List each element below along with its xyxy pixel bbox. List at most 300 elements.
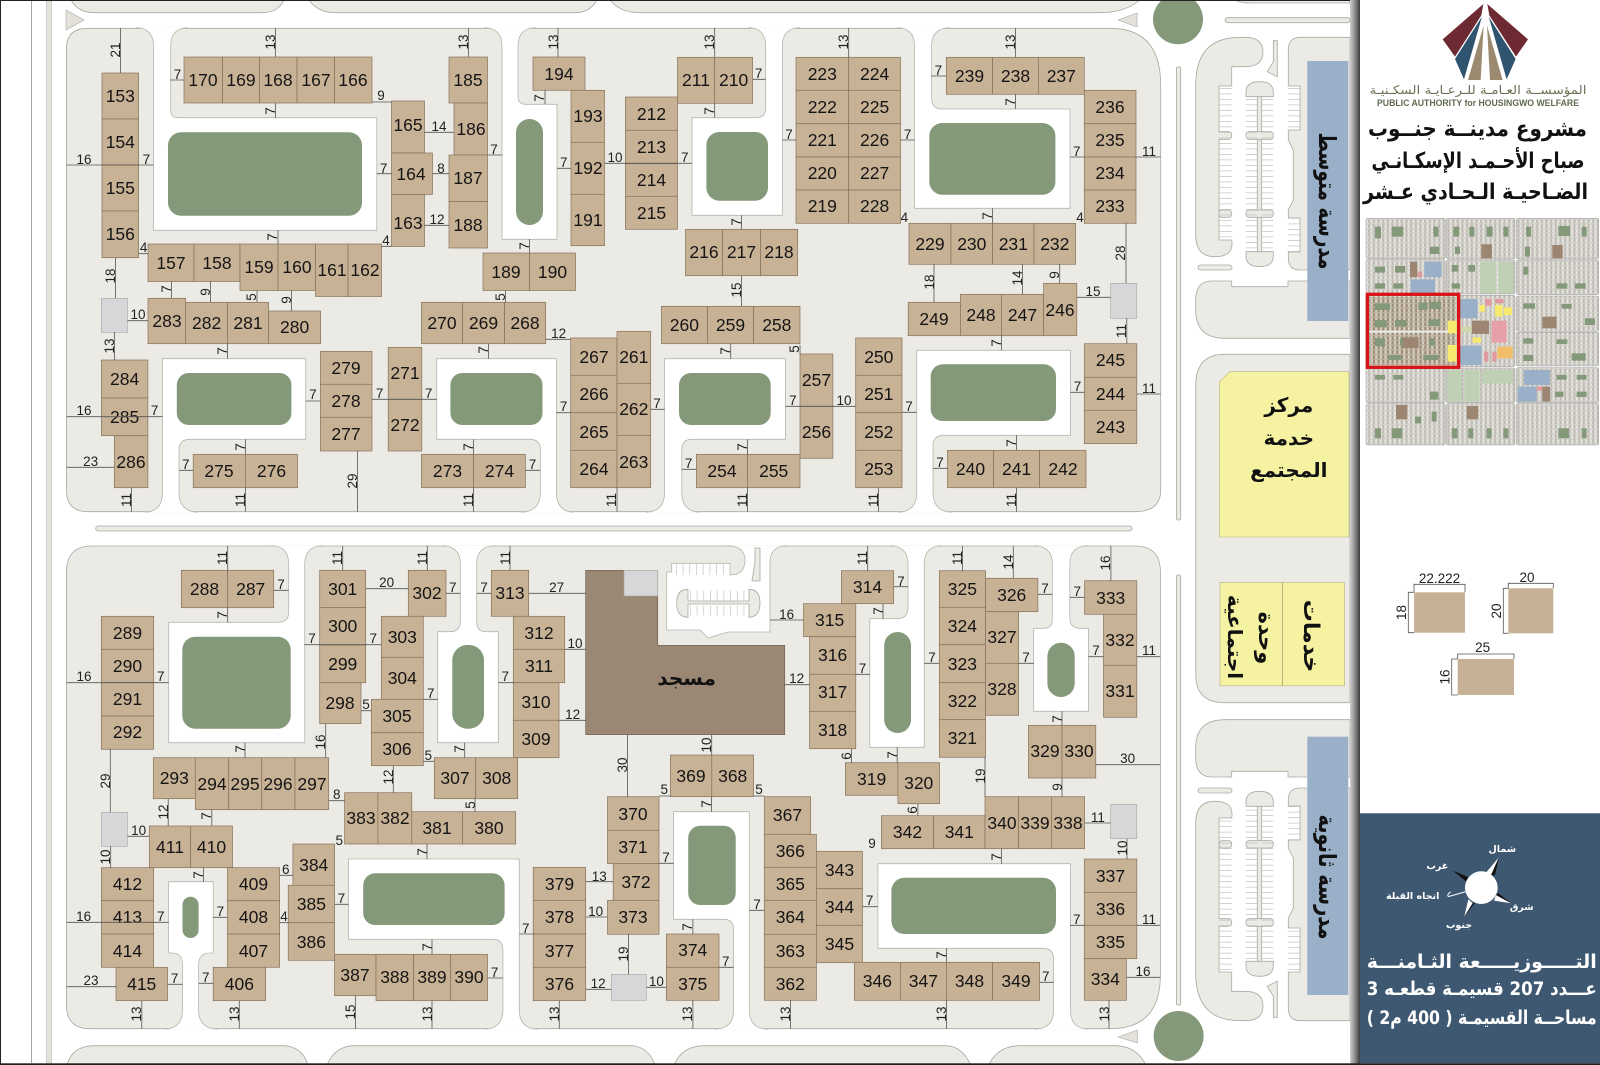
- distribution summary: [1367, 951, 1597, 1029]
- lots: middle row west: 274: [485, 461, 514, 481]
- secondary-school plot: [1307, 737, 1348, 995]
- dimensions: upper block bottom half: 11: [1142, 381, 1156, 396]
- dimensions: lower block top half: 11: [855, 551, 870, 565]
- dimensions: lower block top half: 16: [76, 669, 92, 684]
- lots: north-east cluster: 226: [860, 130, 889, 150]
- dimensions: lower block bottom half: 13: [420, 1006, 435, 1022]
- dimensions: lower block bottom half: 7: [1042, 969, 1049, 984]
- lots: middle row east: 250: [864, 347, 894, 367]
- lots: middle row east: 243: [1096, 417, 1125, 437]
- dimensions: lower block bottom half: 10: [1115, 840, 1130, 856]
- dimensions: upper block top half: 9: [198, 288, 213, 296]
- compass labels: جنوب: [1446, 920, 1472, 931]
- bottom neighbouring block edges: [67, 1046, 1146, 1065]
- lots: lower west top: 302: [412, 583, 442, 603]
- dimensions: lower block bottom half: 13: [129, 1006, 144, 1022]
- lots: north-west cluster: 188: [453, 215, 483, 235]
- dimensions: upper block bottom half: 7: [560, 399, 567, 414]
- secondary-school plot: مدرسة ثانوية: [1313, 814, 1341, 940]
- lots: north-west cluster: 185: [453, 70, 483, 90]
- dimensions: lower block top half: 7: [480, 580, 488, 595]
- lots: lower east bottom: 346: [863, 971, 892, 991]
- dimensions: lower block bottom half: 7: [989, 853, 1004, 861]
- lots: middle row west: 278: [331, 391, 361, 411]
- lots: lower west top: 291: [113, 689, 142, 709]
- dimensions: upper block bottom half: 5: [787, 345, 802, 353]
- dimensions: lower block bottom half: 13: [778, 1006, 793, 1022]
- social services unit: خدمات: [1298, 600, 1323, 672]
- dimensions: upper block bottom half: 7: [653, 396, 661, 411]
- lots: middle row west: 268: [510, 313, 540, 333]
- lots: north-east cluster: 232: [1040, 234, 1069, 254]
- lots: lower west top: 304: [388, 668, 417, 688]
- dimensions: lower block top half: 12: [565, 707, 580, 722]
- dimensions: upper block bottom half: 7: [789, 393, 797, 408]
- dimensions: upper block top half: 4: [1076, 210, 1084, 225]
- dimensions: upper block top half: 11: [1142, 144, 1156, 159]
- dimensions: lower block bottom half: 7: [722, 954, 729, 969]
- dimensions: upper block bottom half: 7: [1004, 439, 1019, 447]
- dimensions: lower block top half: 7: [1050, 715, 1065, 723]
- lots: lower east top: 316: [818, 645, 847, 665]
- lots: middle row west: 280: [280, 317, 309, 337]
- lots: middle row west: 281: [233, 313, 263, 333]
- dimensions: lower block top half: 16: [779, 607, 794, 622]
- dimensions: upper block top half: 14: [431, 119, 447, 134]
- dimensions: lower block bottom half: 6: [282, 862, 289, 877]
- lots: north-east cluster: 229: [915, 234, 945, 254]
- dimensions: upper block bottom half: 7: [233, 443, 248, 451]
- dimensions: lower block bottom half: 13: [1097, 1006, 1112, 1022]
- lots: lower east top: 317: [818, 682, 847, 702]
- dimensions: lower block bottom half: 7: [1073, 912, 1081, 927]
- lots: middle row west: 285: [110, 407, 139, 427]
- lots: north-east cluster: 221: [808, 130, 837, 150]
- dimensions: upper block top half: 7: [490, 142, 498, 157]
- dimensions: lower block top half: 7: [452, 745, 467, 753]
- plot size diagrams: [1394, 570, 1553, 695]
- dimensions: lower block bottom half: 10: [649, 974, 664, 989]
- dimensions: lower block bottom half: 5: [755, 782, 763, 797]
- lots: north-east cluster: [625, 57, 1136, 276]
- dimensions: lower block top half: 5: [362, 697, 370, 712]
- dimensions: upper block top half: 5: [244, 293, 259, 301]
- lots: middle row east: 246: [1045, 300, 1075, 320]
- dimensions: lower block bottom half: 7: [191, 871, 206, 879]
- lots: middle row west: 264: [579, 459, 609, 479]
- lots: middle row east: 253: [864, 459, 893, 479]
- dimensions: lower block bottom half: 16: [76, 909, 91, 924]
- dimensions: upper block top half: 7: [681, 150, 688, 165]
- dimensions: upper block top half: 15: [729, 282, 744, 298]
- lots: lower west top: 299: [328, 654, 357, 674]
- lots: lower east top: 328: [987, 679, 1017, 699]
- dimensions: lower block top half: 7: [199, 812, 214, 820]
- lots: north-east cluster: 231: [999, 234, 1028, 254]
- dimensions: lower block bottom half: 10: [588, 904, 603, 919]
- dimensions: upper block top half: 21: [108, 42, 123, 58]
- dimensions: upper block bottom half: 12: [551, 326, 566, 341]
- dimensions: upper block bottom half: [66, 284, 1161, 512]
- compass labels: شمال: [1489, 844, 1516, 855]
- dimensions: lower block top half: 7: [370, 631, 377, 646]
- lots: north-east cluster: 225: [860, 97, 889, 117]
- lots: lower west bottom: 378: [545, 907, 574, 927]
- dimensions: upper block top half: 9: [1047, 271, 1062, 279]
- lots: lower east bottom: 337: [1096, 866, 1125, 886]
- dimensions: upper block top half: 7: [785, 127, 793, 142]
- lots: lower west bottom: 390: [454, 967, 484, 987]
- lots: north-west cluster: 160: [282, 257, 312, 277]
- lots: lower east top: 325: [948, 579, 977, 599]
- lots: middle row west: 282: [192, 313, 221, 333]
- lots: lower west bottom: 413: [113, 907, 142, 927]
- lots: middle row east: 255: [759, 461, 788, 481]
- dimensions: lower block bottom half: 6: [905, 806, 920, 814]
- title: [1362, 117, 1588, 205]
- lots: lower east bottom: 349: [1001, 971, 1031, 991]
- lots: middle row west: 266: [579, 384, 609, 404]
- lots: middle row east: 240: [956, 459, 985, 479]
- dimensions: lower block top half: 30: [615, 757, 630, 773]
- lots: lower west top: [101, 570, 565, 810]
- lots: lower east bottom: 375: [678, 974, 707, 994]
- dimensions: lower block top half: 10: [567, 636, 583, 651]
- dimensions: lower block top half: 7: [897, 574, 905, 589]
- side panel shadow: [1350, 0, 1360, 1065]
- lots: middle row east: [617, 283, 1137, 488]
- lots: lower east top: 330: [1064, 741, 1094, 761]
- dimensions: upper block top half: 8: [437, 161, 445, 176]
- lots: north-west cluster: 156: [106, 224, 135, 244]
- lots: lower east bottom: 343: [825, 860, 854, 880]
- dimensions: upper block bottom half: 7: [182, 457, 189, 472]
- lots: middle row west: 269: [469, 313, 498, 333]
- lots: north-west cluster: 154: [106, 132, 135, 152]
- lots: north-east cluster: 214: [637, 170, 666, 190]
- lots: lower east bottom: 374: [678, 940, 708, 960]
- dimensions: lower block top half: 11: [498, 551, 513, 565]
- lots: north-east cluster: 239: [955, 66, 984, 86]
- dimensions: upper block top half: 5: [493, 293, 508, 301]
- dimensions: lower block bottom half: 11: [1091, 810, 1105, 825]
- lots: lower east bottom: 348: [955, 971, 984, 991]
- lots: middle row east: 259: [716, 315, 745, 335]
- dimensions: lower block top half: 7: [427, 686, 434, 701]
- lots: lower west top: 307: [440, 768, 470, 788]
- lots: north-west cluster: 165: [393, 115, 423, 135]
- dimensions: upper block bottom half: 13: [102, 338, 117, 354]
- dimensions: upper block bottom half: 16: [76, 403, 92, 418]
- dimensions: lower block bottom half: 7: [491, 965, 498, 980]
- lots: lower east top: 321: [948, 728, 977, 748]
- lots: north-east cluster: 210: [719, 70, 748, 90]
- dimensions: lower block top half: 7: [157, 669, 164, 684]
- lots: lower west bottom: 388: [380, 967, 409, 987]
- dimensions: lower block top half: 10: [699, 737, 714, 753]
- lots: north-east cluster: 233: [1095, 196, 1125, 216]
- lots: north-west cluster: 161: [317, 260, 347, 280]
- dimensions: lower block top half: 5: [425, 748, 432, 763]
- lots: middle row east: 244: [1096, 384, 1125, 404]
- dimensions: lower block bottom half: 7: [753, 897, 761, 912]
- lots: north-east cluster: 227: [860, 163, 889, 183]
- dimensions: upper block top half: 7: [1073, 144, 1081, 159]
- dimensions: lower block top half: 7: [885, 751, 900, 759]
- dimensions: upper block bottom half: 7: [905, 399, 913, 414]
- dimensions: upper block top half: 7: [904, 127, 911, 142]
- dimensions: upper block top half: 13: [263, 34, 278, 50]
- authority name Arabic: المؤسســة العـامـة للـرعـايـة السكـنيـة: [1370, 83, 1586, 98]
- dimensions: upper block top half: 7: [755, 66, 762, 81]
- lots: lower west bottom: 415: [127, 974, 156, 994]
- community service centre block: خدمة: [1264, 426, 1314, 450]
- lots: lower east bottom: 336: [1096, 899, 1125, 919]
- lots: lower east top: 333: [1096, 588, 1125, 608]
- lots: north-east cluster: 234: [1095, 163, 1125, 183]
- dimensions: upper block bottom half: 11: [461, 493, 476, 507]
- dimensions: lower block bottom half: 12: [591, 976, 606, 991]
- dimensions: upper block bottom half: 11: [735, 493, 750, 507]
- dimensions: upper block bottom half: 7: [425, 386, 432, 401]
- lots: lower west top: 295: [230, 774, 260, 794]
- dimensions: lower block top half: 11: [215, 551, 230, 565]
- lots: lower west bottom: 381: [422, 818, 452, 838]
- dimensions: lower block top half: 7: [1041, 581, 1049, 596]
- dimensions: lower block top half: 7: [1073, 584, 1081, 599]
- middle-school plot: مدرسة متوسط: [1313, 132, 1341, 270]
- dimensions: lower block bottom half: 19: [973, 768, 988, 784]
- lots: middle row west: 276: [257, 461, 286, 481]
- lots: lower west top: 308: [482, 768, 511, 788]
- dimensions: lower block top half: 7: [871, 607, 886, 615]
- dimensions: lower block bottom half: 9: [868, 836, 876, 851]
- lots: north-east cluster: 218: [764, 242, 794, 262]
- lots: lower west bottom: 414: [113, 941, 142, 961]
- dimensions: upper block bottom half: 7: [476, 346, 491, 354]
- dimensions: upper block top half: 13: [702, 34, 717, 50]
- dimensions: upper block top half: 10: [607, 150, 623, 165]
- lots: middle row east: 241: [1002, 459, 1031, 479]
- dimensions: lower block bottom half: 16: [1135, 964, 1151, 979]
- lots: lower east top: 323: [948, 654, 977, 674]
- lots: lower east top: 326: [997, 585, 1026, 605]
- dimensions: upper block top half: 4: [901, 210, 909, 225]
- lots: lower east bottom: 338: [1053, 813, 1083, 833]
- lots: north-east cluster: 224: [860, 64, 889, 84]
- lots: lower west top: 310: [521, 692, 551, 712]
- lots: lower west top: 292: [113, 722, 142, 742]
- lots: middle row east: 257: [802, 370, 831, 390]
- dimensions: upper block top half: 9: [279, 296, 294, 304]
- dimensions: lower block bottom half: 10: [98, 849, 113, 865]
- gray service plots: [101, 283, 1137, 1000]
- dimensions: upper block bottom half: 10: [130, 307, 146, 322]
- lots: north-east cluster: 220: [808, 163, 837, 183]
- dimensions: lower block top half: 12: [381, 769, 396, 785]
- lots: lower east bottom: 363: [776, 941, 805, 961]
- lots: lower east top: [804, 571, 1137, 804]
- lots: north-east cluster: 235: [1095, 130, 1125, 150]
- lots: lower west top: 313: [495, 583, 525, 603]
- dimensions: lower block top half: 11: [1142, 643, 1156, 658]
- dimensions: lower block top half: 14: [1001, 554, 1016, 570]
- dimensions: upper block top half: 7: [380, 161, 387, 176]
- dimensions: lower block top half: 7: [502, 669, 509, 684]
- dimensions: upper block bottom half: 10: [836, 393, 852, 408]
- lots: lower west bottom: 379: [545, 874, 574, 894]
- lots: lower west bottom: 407: [239, 941, 268, 961]
- lots: lower east bottom: 367: [773, 805, 802, 825]
- distribution summary: التـــــوزيـــــعة الثـامنـــة: [1367, 951, 1597, 973]
- dimensions: upper block top half: [66, 28, 1161, 311]
- lots: lower east bottom: 372: [621, 872, 651, 892]
- lots: lower east top: 322: [948, 691, 977, 711]
- lots: lower west bottom: 386: [297, 932, 326, 952]
- lots: north-west cluster: 157: [156, 253, 186, 273]
- lots: north-west cluster: 163: [393, 213, 423, 233]
- lots: lower west bottom: 409: [239, 874, 268, 894]
- lots: lower west top: 306: [382, 739, 412, 759]
- lots: lower east top: 319: [857, 769, 886, 789]
- lots: lower west bottom: 384: [299, 855, 329, 875]
- lots: lower east bottom: 369: [676, 766, 706, 786]
- icon: authority logo: [1443, 4, 1528, 80]
- lots: middle row west: 275: [204, 461, 234, 481]
- lots: lower west top: 293: [160, 768, 189, 788]
- lots: north-west cluster: 193: [573, 106, 603, 126]
- lots: lower east bottom: [608, 755, 1137, 1000]
- dimensions: lower block top half: [66, 546, 1160, 826]
- dimensions: lower block bottom half: 15: [343, 1004, 358, 1020]
- lots: middle row west: 265: [579, 422, 609, 442]
- dimensions: upper block top half: 16: [76, 152, 92, 167]
- lots: lower west top: 309: [521, 729, 551, 749]
- plot size diagrams: 20: [1489, 603, 1504, 619]
- dimensions: upper block top half: 12: [429, 212, 445, 227]
- dimensions: lower block bottom half: 4: [280, 909, 288, 924]
- dimensions: upper block bottom half: 11: [604, 493, 619, 507]
- lots: lower east top: 315: [815, 610, 844, 630]
- central road median and east median: [96, 67, 1181, 1005]
- lots: north-west cluster: 169: [226, 70, 256, 90]
- dimensions: lower block bottom half: 13: [934, 1006, 949, 1022]
- lots: lower west bottom: 387: [340, 965, 370, 985]
- lots: middle row east: 258: [762, 315, 791, 335]
- compass labels: غرب: [1426, 861, 1448, 872]
- dimensions: upper block bottom half: 11: [1004, 493, 1019, 507]
- lots: north-east cluster: 223: [808, 64, 837, 84]
- middle-school plot: [1307, 61, 1348, 321]
- dimensions: lower block bottom half: 7: [866, 893, 873, 908]
- dimensions: lower block bottom half: 7: [217, 904, 224, 919]
- lots: lower west bottom: 376: [545, 974, 574, 994]
- dimensions: upper block top half: 4: [140, 240, 148, 255]
- dimensions: upper block top half: 14: [1010, 270, 1025, 286]
- lots: lower west top: 294: [197, 774, 227, 794]
- dimensions: upper block bottom half: 7: [735, 443, 750, 451]
- lots: lower east bottom: 366: [776, 841, 805, 861]
- lots: lower east bottom: 373: [618, 907, 648, 927]
- lots: lower east top: 318: [818, 720, 847, 740]
- dimensions: lower block bottom half: 13: [547, 1006, 562, 1022]
- dimensions: upper block bottom half: 7: [936, 455, 944, 470]
- lots: lower west bottom: 410: [197, 837, 226, 857]
- east parking areas lower: [1196, 720, 1350, 1021]
- lots: lower east top: 327: [987, 627, 1017, 647]
- lots: lower west bottom: 408: [239, 907, 268, 927]
- lots: lower east bottom: 344: [825, 897, 854, 917]
- lots: lower west bottom: 412: [113, 874, 142, 894]
- lots: middle row east: 260: [670, 315, 699, 335]
- lots: middle row east: 242: [1048, 459, 1078, 479]
- dimensions: lower block bottom half: 7: [934, 951, 949, 959]
- plot size diagrams: 16: [1438, 669, 1452, 685]
- dimensions: upper block bottom half: 15: [1085, 284, 1101, 299]
- dimensions: lower block top half: 11: [415, 551, 430, 565]
- dimensions: upper block top half: 13: [546, 34, 561, 50]
- lots: middle row west: 270: [427, 313, 457, 333]
- plot size diagrams: 22.222: [1419, 571, 1460, 586]
- dimensions: lower block top half: 12: [789, 671, 804, 686]
- compass: [1448, 857, 1511, 917]
- lots: lower west top: 312: [524, 623, 554, 643]
- dimensions: lower block bottom half: 5: [336, 833, 343, 848]
- mosque: [586, 570, 785, 735]
- lots: lower east bottom: 364: [776, 907, 805, 927]
- dimensions: upper block bottom half: 7: [376, 386, 383, 401]
- lots: north-east cluster: 228: [860, 196, 889, 216]
- upper block ground: [66, 28, 1161, 512]
- lots: north-west cluster: 167: [301, 70, 331, 90]
- lots: north-east cluster: 216: [689, 242, 719, 262]
- dimensions: lower block bottom half: 13: [592, 869, 607, 884]
- dimensions: lower block bottom half: 9: [1050, 783, 1065, 791]
- dimensions: upper block top half: 7: [1003, 98, 1018, 106]
- lower block ground: [66, 546, 1160, 1029]
- lots: lower west bottom: 406: [225, 974, 254, 994]
- lots: middle row east: 263: [619, 452, 648, 472]
- dimensions: upper block top half: 7: [935, 63, 942, 78]
- lots: north-west cluster: 158: [202, 253, 232, 273]
- lots: lower west top: 288: [190, 579, 219, 599]
- lots: north-west cluster: 192: [573, 158, 603, 178]
- lots: north-east cluster: 212: [637, 104, 666, 124]
- dimensions: upper block bottom half: 7: [461, 443, 476, 451]
- lots: north-west cluster: 155: [106, 178, 135, 198]
- lots: lower west bottom: 389: [417, 967, 447, 987]
- dimensions: upper block top half: 7: [980, 212, 995, 220]
- lots: middle row west: 267: [579, 347, 609, 367]
- plot size diagrams: 25: [1475, 640, 1490, 655]
- dimensions: upper block bottom half: 23: [83, 454, 98, 469]
- lots: lower west top: 300: [328, 616, 358, 636]
- dimensions: lower block top half: 29: [98, 773, 113, 789]
- lots: north-west cluster: 170: [188, 70, 218, 90]
- dimensions: upper block top half: 7: [532, 94, 547, 102]
- dimensions: upper block top half: 7: [560, 155, 567, 170]
- lots: middle row west: 272: [390, 415, 420, 435]
- lots: lower west bottom: 382: [380, 808, 410, 828]
- dark info panel: [1360, 813, 1600, 1063]
- traffic islands and roundabouts: [66, 0, 1204, 1061]
- dimensions: lower block top half: 7: [277, 577, 285, 592]
- mosque: مسجد: [657, 666, 716, 690]
- dimensions: lower block bottom half: 5: [661, 782, 668, 797]
- lots: north-west cluster: 186: [456, 119, 486, 139]
- dimensions: lower block top half: 6: [839, 752, 854, 760]
- lots: middle row east: 254: [707, 461, 737, 481]
